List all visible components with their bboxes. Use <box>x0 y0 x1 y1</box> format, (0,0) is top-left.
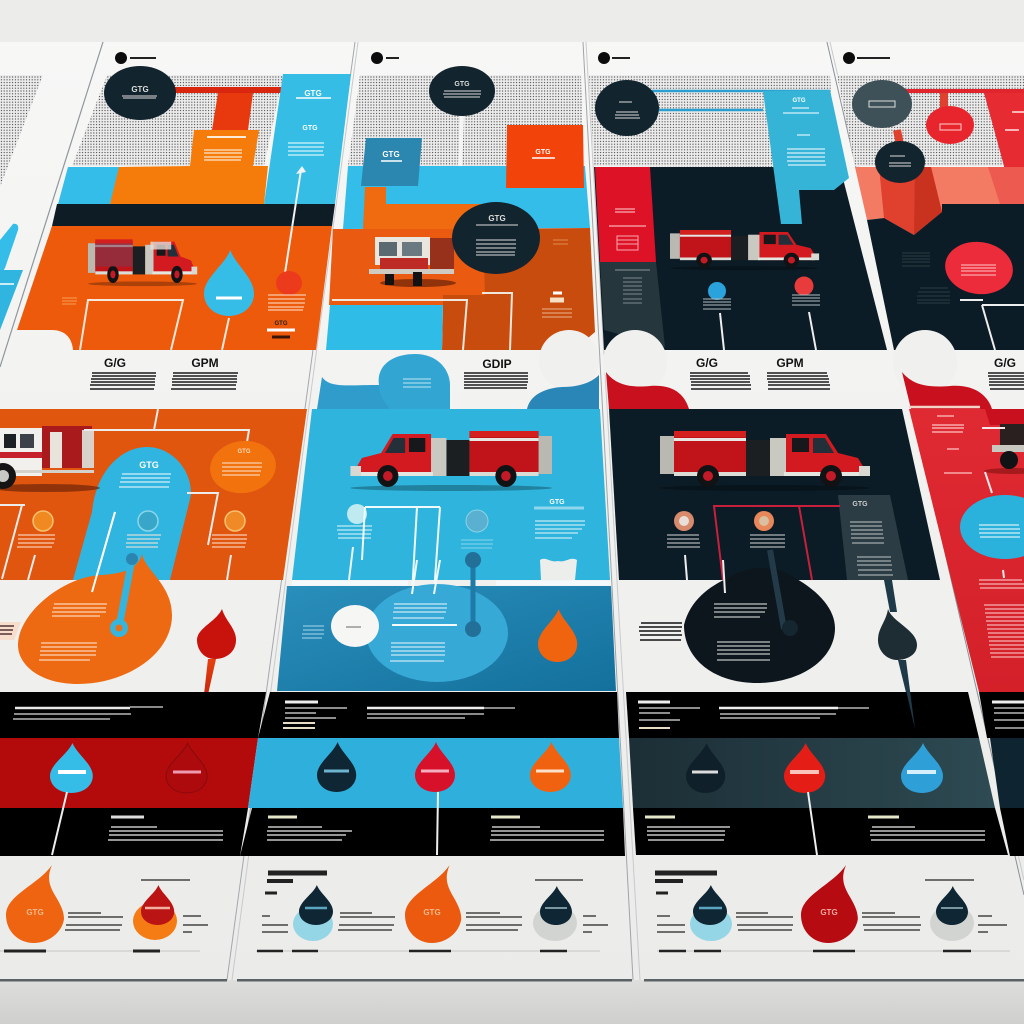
white bump <box>893 330 957 394</box>
arrow <box>285 166 306 273</box>
paired dark drop, gray base <box>930 886 974 941</box>
GPM column <box>988 356 1024 389</box>
blue square <box>361 138 422 186</box>
blue arch: GTG <box>139 460 159 470</box>
panel: blue sheet, gauge section <box>277 552 616 691</box>
panel: red sheet, upper section <box>837 52 1024 409</box>
fire truck <box>660 431 870 491</box>
connector lines <box>0 409 249 592</box>
blue disc <box>366 584 508 682</box>
fire truck <box>670 230 819 270</box>
notes <box>267 817 604 840</box>
dark drop <box>686 743 725 793</box>
panel: dark sheet, upper section <box>589 52 887 409</box>
white divider <box>292 580 611 586</box>
red bar <box>900 89 1024 93</box>
main orange block <box>329 229 485 305</box>
white lines <box>349 507 440 594</box>
large orange drop <box>6 865 64 943</box>
notes on dark orange <box>542 240 572 317</box>
GPM columns: G/G <box>696 356 718 370</box>
blue drop <box>50 743 93 793</box>
side tag <box>639 623 682 640</box>
panel: orange sheet, upper section <box>17 52 351 389</box>
red badge and notes <box>62 271 306 337</box>
small paired drop <box>133 885 177 940</box>
orange callout: GTG <box>238 449 251 455</box>
panel: dark sheet, gauge section <box>639 550 917 729</box>
pale icons <box>337 504 493 548</box>
water drop <box>204 250 254 316</box>
white circle <box>331 605 379 647</box>
fire truck cropped <box>984 424 1024 474</box>
dark circle <box>595 80 659 136</box>
stems <box>897 93 944 145</box>
red stripe <box>988 167 1024 204</box>
GPM column: GDIP <box>482 357 512 371</box>
dark circle <box>429 66 495 116</box>
gray note block <box>838 495 908 580</box>
blue column: GTG <box>302 125 318 132</box>
blue arch <box>73 447 191 580</box>
note lines <box>15 707 130 709</box>
orange connector <box>363 187 490 229</box>
blue column: GTG <box>304 89 322 98</box>
black bar <box>52 204 335 226</box>
gray note block: GTG <box>852 501 868 508</box>
footer <box>0 950 200 952</box>
panel: blue sheet, band section <box>240 692 625 856</box>
footer <box>657 950 1010 952</box>
red outlined drop <box>166 743 207 793</box>
text column <box>932 416 972 473</box>
large red drop: GTG <box>820 908 838 917</box>
dark drop with tail <box>878 580 917 729</box>
fire truck, front view <box>369 237 456 287</box>
text note: GTG <box>549 499 565 506</box>
badges <box>667 511 785 547</box>
vertical leader <box>808 792 817 855</box>
dark main field <box>594 167 887 350</box>
red circle <box>926 106 974 144</box>
dark field <box>867 204 1024 350</box>
blue drop <box>901 743 943 793</box>
blue column <box>264 74 351 204</box>
red block <box>595 167 656 262</box>
red drop <box>415 742 455 792</box>
notes <box>979 580 1024 657</box>
fire truck <box>88 239 197 286</box>
GPM columns <box>90 356 238 389</box>
captions <box>65 880 208 932</box>
side note <box>302 626 324 638</box>
paired dark drop, blue base <box>690 885 732 941</box>
GPM column: G/G <box>994 356 1016 370</box>
black gauge disc <box>684 568 835 683</box>
notes <box>645 817 985 840</box>
panel: red sheet, lower section <box>909 407 1024 692</box>
header bullet <box>843 52 890 64</box>
text note <box>534 499 585 538</box>
orange square <box>506 125 584 188</box>
badges <box>703 276 820 309</box>
footer <box>256 950 600 952</box>
blue wave <box>527 375 599 409</box>
dark circle with notes <box>452 202 540 274</box>
gauge stick <box>770 550 798 636</box>
band notes <box>638 702 869 728</box>
connector <box>982 428 1005 578</box>
red outline <box>714 506 840 580</box>
pale shirt block <box>540 559 577 580</box>
dark orange block <box>442 228 595 350</box>
GPM columns: GPM <box>776 356 804 370</box>
GPM columns: GPM <box>191 356 219 370</box>
gray block <box>600 262 665 347</box>
orange main block <box>17 226 332 350</box>
red drop <box>784 743 825 793</box>
dark circle callout: GTG <box>131 85 149 94</box>
fire truck <box>350 431 552 491</box>
heading <box>655 873 717 893</box>
white connector <box>960 300 1024 350</box>
panel: dark sheet, band section <box>626 660 1008 855</box>
large orange drop: GTG <box>423 908 441 917</box>
red column <box>984 93 1024 204</box>
panel: blue sheet, bottom drops <box>256 865 608 951</box>
side tag <box>0 622 21 640</box>
blue square base <box>326 305 443 350</box>
panel: red sheet, band section <box>979 692 1024 856</box>
panel: orange sheet, band section <box>0 692 266 856</box>
panel: cropped sheet at far left <box>0 75 43 330</box>
header bullet <box>598 52 630 64</box>
orange callout <box>207 437 279 497</box>
large orange drop <box>405 865 461 943</box>
GPM columns <box>690 356 830 389</box>
header bullet <box>115 52 156 64</box>
captions <box>657 880 1007 932</box>
red drop with tail <box>197 609 236 730</box>
connector lines <box>80 300 229 350</box>
white needle lines <box>92 512 115 592</box>
orange block <box>110 130 268 204</box>
red badge and notes: GTG <box>274 321 288 327</box>
blue column <box>763 90 849 224</box>
paired dark drop, gray base <box>533 886 577 941</box>
red wave <box>902 372 992 409</box>
dark circle <box>875 141 925 183</box>
vertical leader <box>437 792 438 855</box>
blue bump <box>317 354 450 409</box>
gauge stick <box>465 552 481 637</box>
orange square: GTG <box>535 149 551 156</box>
panel: blue sheet, lower section <box>292 409 611 594</box>
white stem <box>460 116 462 166</box>
white connector <box>332 293 512 350</box>
left blue band <box>58 167 119 204</box>
panel: orange sheet, bottom drops <box>0 865 208 951</box>
vertical leader <box>52 792 67 855</box>
gray circle <box>852 80 912 128</box>
blue square: GTG <box>382 150 400 159</box>
red ellipse <box>942 238 1016 298</box>
paired dark drop, light blue base <box>293 885 333 941</box>
orange drop <box>530 742 571 792</box>
heading <box>265 873 327 893</box>
dark circle: GTG <box>454 81 470 88</box>
orange gauge disc <box>18 554 172 684</box>
panel: orange sheet, gauge section <box>0 512 236 730</box>
blue column: GTG <box>792 98 806 104</box>
white leader <box>723 560 725 593</box>
panel: dark sheet, lower section <box>609 409 940 580</box>
orange drop <box>538 609 577 662</box>
GPM column <box>464 357 528 388</box>
fire truck <box>0 426 100 492</box>
blue ellipse <box>960 495 1024 559</box>
header bullet <box>371 52 399 64</box>
dotted texture <box>72 75 283 166</box>
icon row <box>17 511 247 547</box>
panel: dark sheet, bottom drops <box>655 865 1010 951</box>
dark circle callout <box>104 66 176 120</box>
red bar connector <box>175 87 283 130</box>
GPM columns: G/G <box>104 356 126 370</box>
blue band <box>343 166 590 229</box>
panel: blue sheet, upper section <box>317 52 599 409</box>
captions <box>262 880 608 932</box>
band notes <box>283 702 515 728</box>
dim notes <box>902 253 950 303</box>
white stems <box>720 312 816 350</box>
dark drop <box>317 742 356 792</box>
salmon band <box>855 167 1024 235</box>
white bump <box>539 330 599 390</box>
dark circle with notes: GTG <box>488 214 506 223</box>
blue lines <box>652 91 830 110</box>
blue gauge stick <box>110 553 138 637</box>
notes <box>108 817 223 840</box>
red wave <box>606 372 689 409</box>
white bump <box>603 330 667 394</box>
panel: orange sheet, lower section <box>0 409 307 592</box>
red folded shape <box>879 167 942 235</box>
white guide lines over disc <box>412 560 440 594</box>
large red drop <box>801 865 858 943</box>
large orange drop: GTG <box>26 908 44 917</box>
